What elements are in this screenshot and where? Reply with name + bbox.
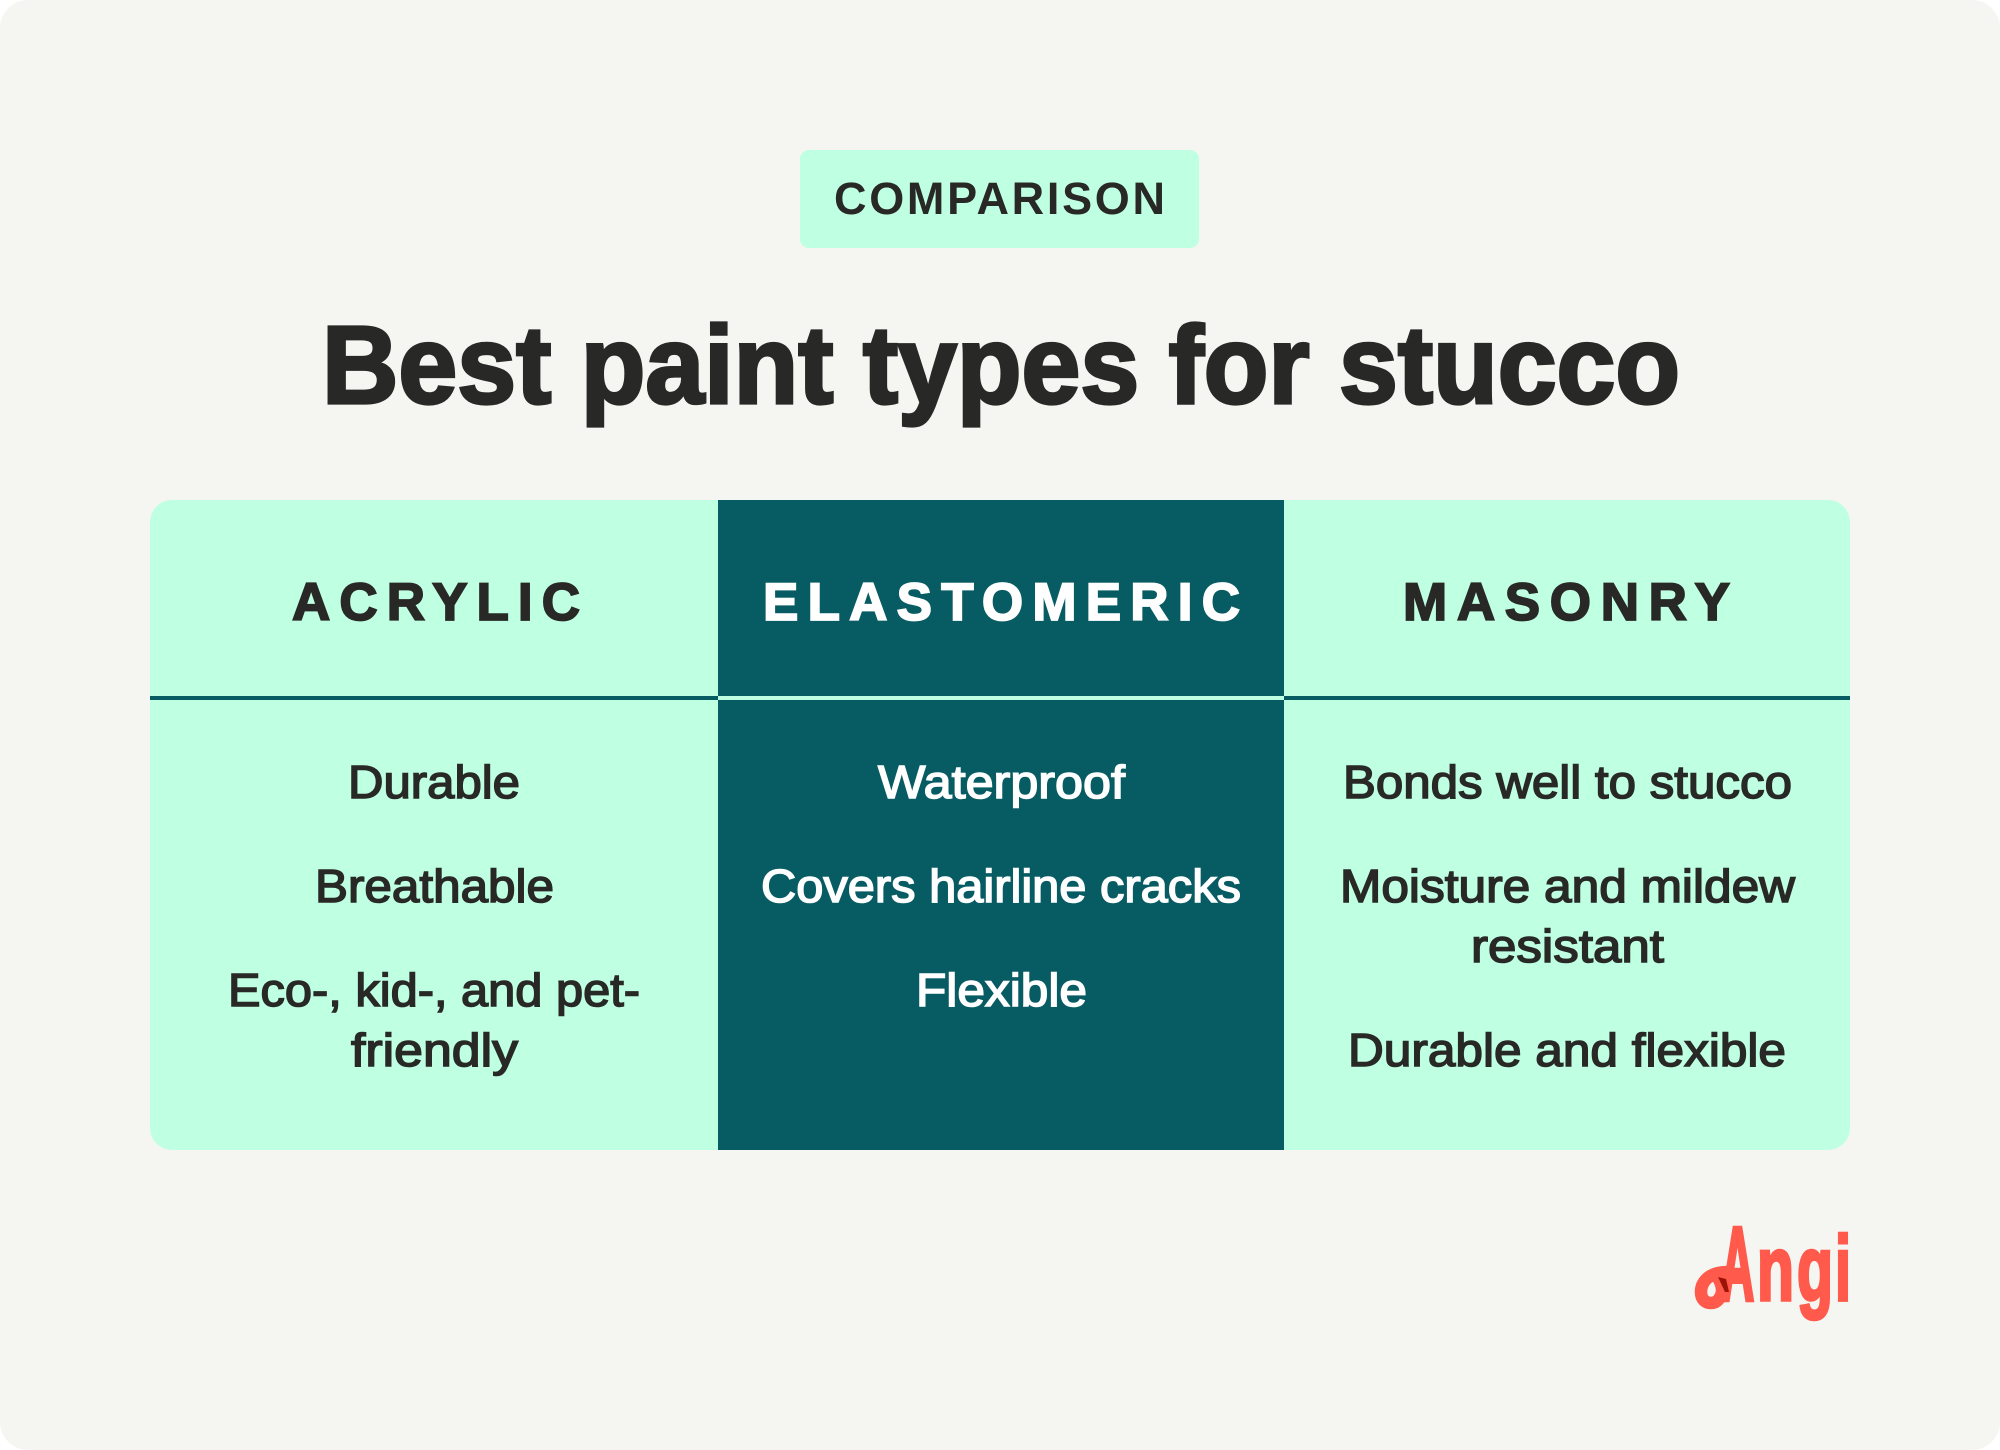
list: acrylic benefits: Eco-, kid-, and pet- <box>228 964 640 1016</box>
tag: comparison <box>800 150 1199 248</box>
column heading: acrylic: ACRYLIC <box>292 573 580 632</box>
column: acrylic <box>228 573 640 1076</box>
list: elastomeric benefits: Covers hairline cracks <box>761 860 1241 912</box>
list: acrylic benefits <box>228 756 640 1076</box>
list: masonry benefits: Moisture and mildew <box>1340 860 1796 912</box>
list: elastomeric benefits: Flexible <box>916 964 1087 1016</box>
title: Best paint types for stucco <box>322 304 1680 427</box>
column: elastomeric <box>761 573 1241 1016</box>
list: elastomeric benefits: Waterproof <box>878 756 1125 808</box>
list: acrylic benefits: Breathable <box>315 860 554 912</box>
logo: Angi: n <box>1757 1218 1794 1320</box>
logo: Angi: A <box>1721 1207 1754 1323</box>
list: acrylic benefits: friendly <box>351 1024 518 1076</box>
logo: Angi <box>1701 1207 1851 1323</box>
list: masonry benefits: resistant <box>1471 920 1664 972</box>
comparison table <box>150 500 1850 1150</box>
list: acrylic benefits: Durable <box>348 756 520 808</box>
tag: comparison: COMPARISON <box>834 173 1165 224</box>
list: elastomeric benefits <box>761 756 1241 1016</box>
list: masonry benefits <box>1340 756 1796 1076</box>
logo: Angi: g <box>1797 1218 1833 1320</box>
list: masonry benefits: Bonds well to stucco <box>1343 756 1792 808</box>
column heading: masonry: MASONRY <box>1403 573 1730 632</box>
column: masonry <box>1340 573 1796 1076</box>
column heading: elastomeric: ELASTOMERIC <box>763 573 1240 632</box>
list: masonry benefits: Durable and flexible <box>1348 1024 1786 1076</box>
logo: Angi: i <box>1835 1218 1851 1320</box>
